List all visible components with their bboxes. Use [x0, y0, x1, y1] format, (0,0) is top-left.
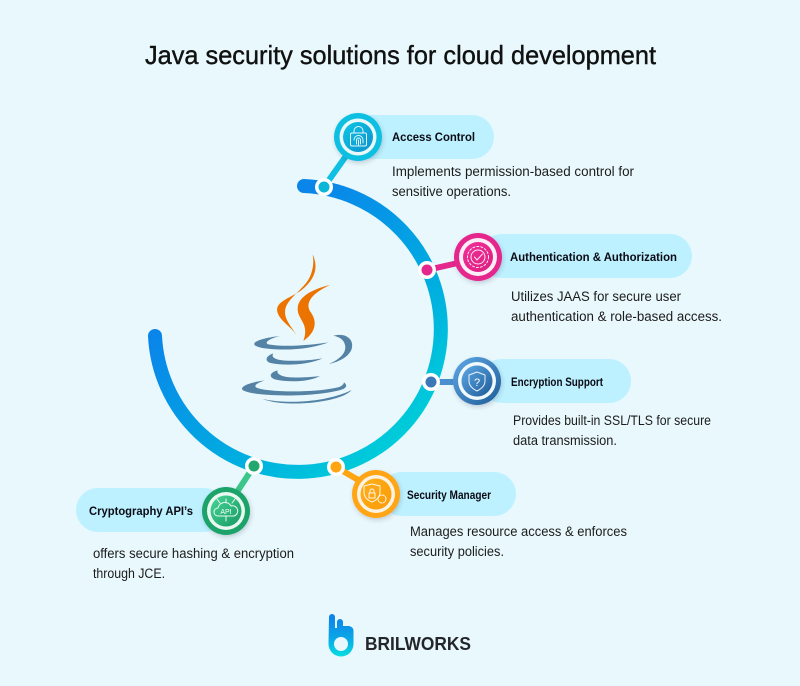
panel: Access Control	[315, 113, 635, 199]
icon: API cloud	[202, 487, 250, 535]
label pill: Security Manager	[380, 472, 516, 516]
timeline node: Authentication	[418, 261, 436, 279]
heading: Authentication: Authentication & Authorization	[510, 252, 677, 264]
icon: shield with lock and gear	[352, 470, 400, 518]
connector: Cryptography APIs	[237, 466, 254, 492]
timeline node: Access Control	[315, 178, 333, 196]
panel: Encryption Support	[422, 357, 711, 448]
panel: Authentication & Authorization	[418, 233, 722, 324]
title: Java security solutions for cloud development	[145, 40, 657, 70]
icon: Brilworks mark	[328, 614, 354, 656]
label pill: Encryption Support	[480, 359, 631, 403]
connector: Access Control	[324, 156, 346, 187]
label pill: Cryptography APIs	[76, 488, 226, 532]
icon: API cloud: API	[220, 509, 232, 516]
description: Security Manager	[410, 524, 627, 559]
description: Cryptography APIs	[93, 546, 294, 581]
icon: verified badge	[454, 233, 502, 281]
logo: Brilworks	[328, 614, 471, 656]
connector: Security Manager	[336, 467, 360, 481]
connector: Encryption Support	[431, 379, 458, 385]
timeline node: Security Manager	[327, 458, 345, 476]
heading: Access Control: Access Control	[392, 132, 475, 144]
description: Authentication	[511, 289, 722, 324]
label pill: Authentication	[480, 234, 692, 278]
timeline node: Encryption Support	[422, 373, 440, 391]
icon: shield question	[453, 357, 501, 405]
description: Encryption Support: data transmission.	[513, 433, 617, 448]
description: Security Manager: Manages resource access & enforces	[410, 524, 627, 539]
description: Encryption Support	[513, 413, 711, 448]
wordmark: BRILWORKS: BRILWORKS	[365, 634, 471, 654]
heading: Cryptography APIs: Cryptography API’s	[89, 506, 193, 518]
description: Encryption Support: Provides built-in SSL/TLS for secure	[513, 413, 711, 428]
description: Access Control: sensitive operations.	[392, 184, 511, 199]
description: Cryptography APIs: through JCE.	[93, 566, 165, 581]
description: Cryptography APIs: offers secure hashing & encryption	[93, 546, 294, 561]
circular arc timeline	[155, 186, 441, 472]
timeline node: Cryptography APIs	[245, 457, 263, 475]
description: Access Control: Implements permission-based control for	[392, 164, 635, 179]
connector: Authentication	[427, 263, 458, 270]
icon: fingerprint padlock	[334, 113, 382, 161]
icon: Java logo	[242, 254, 352, 404]
label pill: Access Control	[345, 115, 494, 159]
description: Authentication: Utilizes JAAS for secure user	[511, 289, 682, 304]
icon: shield question: ?	[474, 377, 480, 389]
description: Security Manager: security policies.	[410, 544, 504, 559]
heading: Security Manager: Security Manager	[407, 490, 491, 502]
heading: Encryption Support: Encryption Support	[511, 377, 603, 389]
description: Authentication: authentication & role-based access.	[511, 309, 722, 324]
description: Access Control	[392, 164, 635, 199]
panel: Security Manager	[327, 458, 627, 559]
panel: Cryptography APIs	[76, 457, 294, 581]
